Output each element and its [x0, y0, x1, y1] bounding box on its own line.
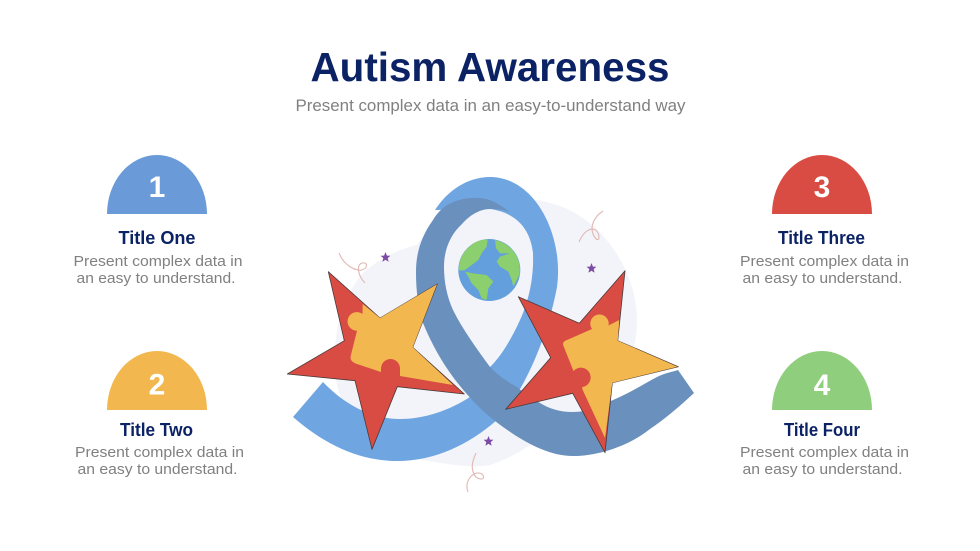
badge one — [107, 155, 207, 214]
subtitle: Present complex data in an easy-to-understand way — [296, 96, 686, 115]
red star — [506, 271, 678, 453]
title: Autism Awareness — [310, 44, 670, 90]
text two: Present complex data in — [75, 444, 244, 461]
heading one: Title One — [118, 227, 196, 248]
badge three — [772, 155, 872, 214]
heading two: Title Two — [120, 419, 193, 440]
yellow puzzle piece — [563, 314, 678, 438]
text one: an easy to understand. — [76, 270, 236, 287]
text one: Present complex data in — [74, 253, 242, 270]
purple star bottom — [484, 436, 493, 446]
text two: an easy to understand. — [78, 461, 238, 478]
panel: item two — [75, 351, 244, 478]
number four: 4 — [814, 369, 831, 402]
yellow puzzle piece — [348, 284, 453, 385]
text three: Present complex data in — [740, 253, 909, 270]
number one: 1 — [149, 171, 165, 204]
red star — [287, 272, 464, 449]
panel: item one — [74, 155, 242, 287]
globe — [458, 239, 520, 301]
badge four — [772, 351, 872, 410]
squiggle top right — [579, 211, 603, 242]
illustration: autism awareness ribbon — [293, 177, 694, 492]
ribbon light strand — [293, 177, 558, 461]
left puzzle star — [287, 272, 464, 449]
number three: 3 — [814, 171, 830, 204]
squiggle left — [339, 253, 366, 283]
background blob — [335, 199, 637, 466]
heading four: Title Four — [784, 419, 860, 440]
badge two — [107, 351, 207, 410]
number two: 2 — [149, 368, 165, 402]
text three: an easy to understand. — [742, 270, 902, 287]
purple star right — [587, 263, 596, 273]
purple star left — [381, 252, 390, 262]
right puzzle star — [506, 271, 678, 453]
panel: item four — [740, 351, 909, 478]
squiggle bottom — [467, 453, 484, 492]
panel: item three — [740, 155, 909, 287]
text four: Present complex data in — [740, 444, 909, 461]
ribbon dark strand — [416, 198, 694, 456]
text four: an easy to understand. — [742, 461, 902, 478]
heading three: Title Three — [778, 227, 865, 248]
